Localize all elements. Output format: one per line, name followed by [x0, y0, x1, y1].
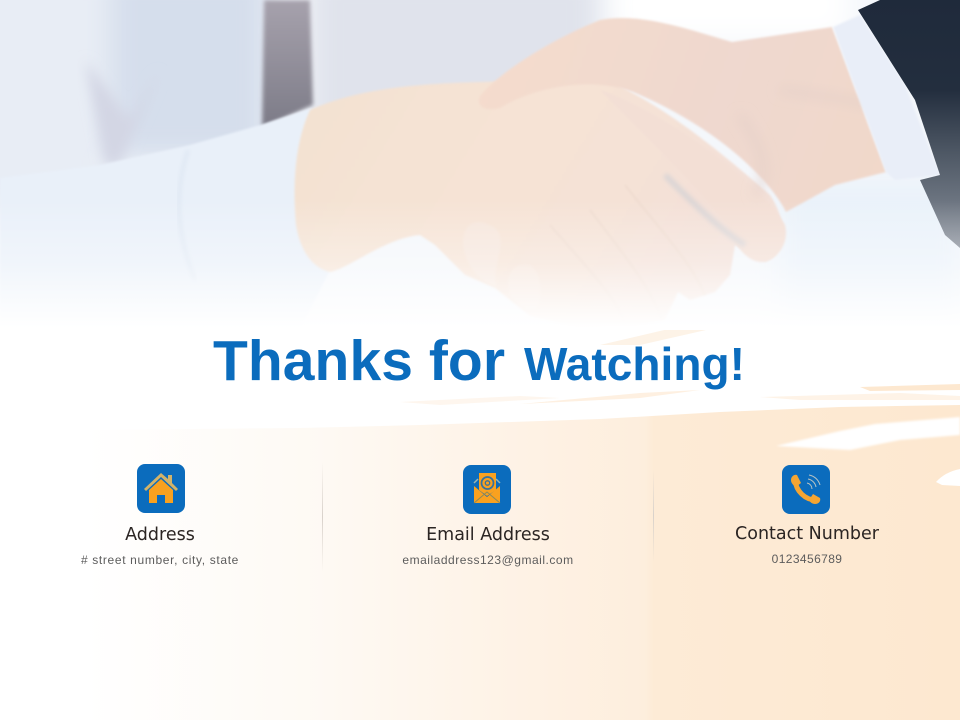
text: street: # street number, city, state — [81, 553, 239, 567]
heading: contact: Contact Number — [735, 524, 879, 544]
icon: phone — [782, 465, 830, 514]
title: Watching! — [524, 338, 745, 390]
text: email address: emailaddress123@gmail.com — [402, 553, 574, 567]
title — [213, 329, 745, 393]
heading: email: Email Address — [426, 525, 550, 545]
icon: house — [137, 464, 185, 513]
title: Thanks for — [213, 329, 505, 393]
column dividers — [322, 462, 654, 572]
icon: envelope — [463, 465, 511, 514]
orange wash panel — [85, 316, 960, 720]
column: address — [81, 464, 239, 567]
handshake photo — [0, 0, 960, 340]
column: contact — [735, 465, 879, 566]
column: email — [402, 465, 574, 567]
heading: address: Address — [125, 525, 195, 545]
text: phone number: 0123456789 — [772, 552, 842, 566]
